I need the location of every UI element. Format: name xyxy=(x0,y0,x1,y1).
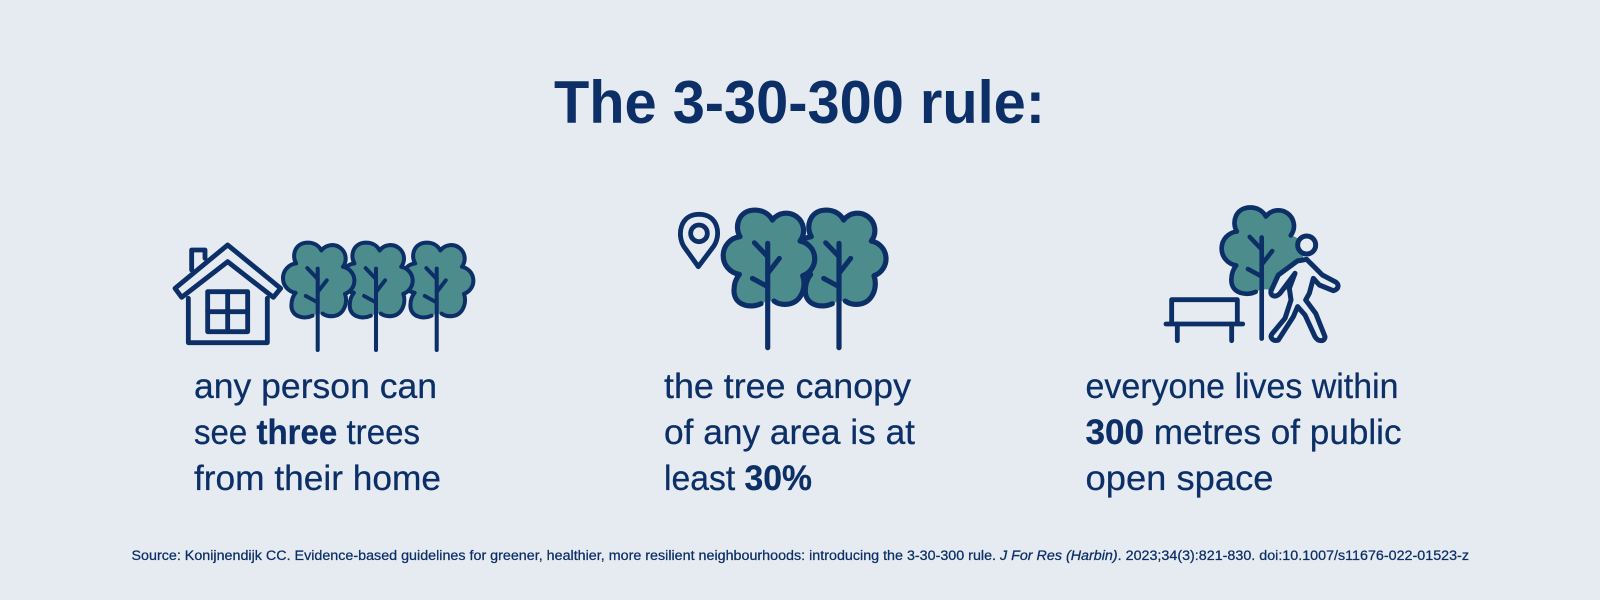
text: three trees rule: any person can xyxy=(194,367,437,406)
icon: canopy tree left xyxy=(723,210,815,348)
icon: third tree xyxy=(402,243,473,350)
title: The 3-30-300 rule: xyxy=(554,69,1045,136)
text: open space rule: everyone lives within xyxy=(1086,367,1398,406)
text: canopy rule: least 30% xyxy=(664,459,812,498)
icon: location pin xyxy=(680,214,718,267)
text: open space rule xyxy=(1086,367,1402,498)
icon: first tree xyxy=(283,243,354,350)
icon: canopy tree right xyxy=(794,210,886,348)
text: canopy rule: of any area is at xyxy=(664,413,915,452)
text: open space rule: 300 metres of public xyxy=(1086,413,1402,452)
icon: park tree, bench and walking person xyxy=(1166,207,1338,341)
icon: second tree xyxy=(341,243,413,350)
text: three trees rule xyxy=(194,367,441,498)
icon: walking person xyxy=(1271,236,1338,341)
text: three trees rule: from their home xyxy=(194,459,441,498)
text: canopy rule xyxy=(664,367,915,498)
text: three trees rule: see three trees xyxy=(194,413,420,452)
icon: house xyxy=(175,245,281,343)
icon: park tree xyxy=(1222,207,1304,339)
icon: house and three trees xyxy=(175,243,473,350)
text: canopy rule: the tree canopy xyxy=(664,367,912,406)
source citation: Source: Konijnendijk CC. Evidence-based guidelines for greener, healthier, more resilient neighbourhoods: introducing the 3-30-300 rule. J For Res (Harbin) . 2023;34(3):821-830. doi:10.1007/s11676-022-01523-z xyxy=(132,548,1469,563)
icon: bench xyxy=(1166,300,1243,341)
text: open space rule: open space xyxy=(1086,459,1274,498)
